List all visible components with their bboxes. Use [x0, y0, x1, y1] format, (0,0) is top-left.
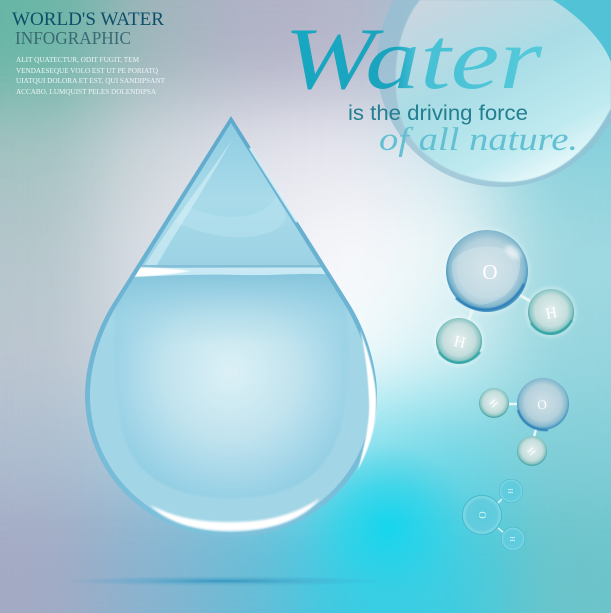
highlight: bottom arc — [150, 498, 320, 531]
molecule 1 — [431, 225, 579, 369]
big water bubble, top right — [377, 0, 611, 187]
molecule 2 — [479, 378, 569, 466]
intro paragraph: ALIT QUATECTUR, ODIT FUGIT, TEM — [16, 55, 139, 64]
upper empty part — [141, 123, 321, 266]
subtitle: infographic: INFOGRAPHIC — [15, 28, 131, 48]
water drop shadow — [60, 576, 390, 586]
atom H left: H — [452, 333, 468, 352]
atom H left — [436, 318, 482, 364]
headline line: of all nature: of all nature. — [379, 122, 578, 158]
water body — [85, 267, 375, 537]
highlight: right edge — [358, 330, 376, 470]
title block — [12, 10, 165, 96]
atom H bottom: H — [508, 536, 517, 542]
bonds — [509, 404, 536, 437]
molecule 3 — [462, 479, 525, 551]
headline: water is the driving force of all nature — [284, 11, 578, 158]
atom O: O — [476, 511, 487, 519]
halos — [523, 284, 579, 340]
inner lens — [396, 0, 611, 182]
inner lens body — [123, 298, 340, 498]
headline line: is the driving force: is the driving force — [348, 102, 528, 125]
intro paragraph: VENDAESEQUE VOLO EST UT PE PORIATQ — [16, 66, 158, 75]
water drop — [85, 116, 377, 537]
atom O: O — [536, 396, 548, 413]
atom H left: H — [486, 398, 499, 410]
atom H top: H — [506, 488, 515, 494]
intro paragraph: UIATQUI DOLORA ET EST, QUI SANDIPSANT — [16, 76, 165, 85]
atom H right: H — [544, 304, 559, 323]
atom O: O — [482, 260, 498, 284]
atom O — [446, 230, 528, 312]
bonds — [468, 294, 530, 322]
headline word: water: Water — [284, 11, 543, 108]
drop rim — [85, 116, 377, 537]
atom H right — [528, 289, 574, 335]
intro paragraph: ACCABO. LUMQUIST PELES DOLENDIPSA — [16, 87, 156, 96]
title: world's water: WORLD'S WATER — [12, 10, 165, 30]
atom H bottom: H — [524, 446, 537, 458]
intro paragraph — [16, 55, 165, 96]
water surface — [128, 268, 338, 277]
bonds — [498, 499, 504, 533]
highlight: upper right edge — [250, 148, 297, 222]
